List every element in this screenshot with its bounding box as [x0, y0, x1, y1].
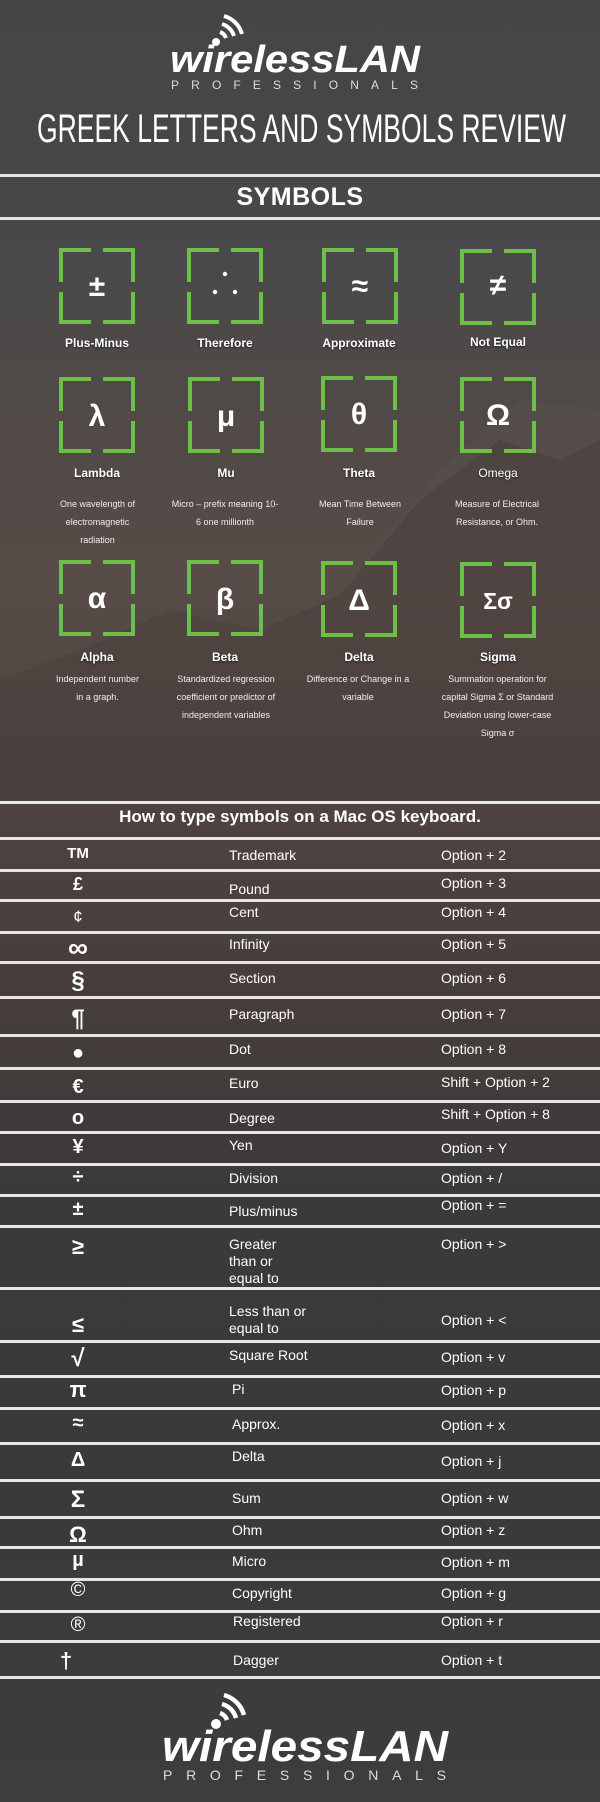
table: keyboard shortcuts: Option + /	[441, 1170, 502, 1186]
table: keyboard shortcuts: Option + t	[441, 1652, 502, 1668]
icon: beta: β	[216, 583, 234, 616]
text: alpha description: Independent number in a graph.	[56, 674, 139, 702]
table: keyboard shortcuts: Option + w	[441, 1490, 508, 1506]
icon: approximate: ≈	[352, 270, 368, 303]
row: yen	[72, 1136, 507, 1158]
table: keyboard shortcuts: Registered	[233, 1613, 301, 1629]
row: plus/minus	[72, 1197, 506, 1220]
icon: omega: Ω	[486, 399, 510, 432]
label: lambda: Lambda	[74, 466, 120, 480]
table: keyboard shortcuts: Greater	[229, 1236, 276, 1252]
label: not equal: Not Equal	[470, 335, 526, 349]
icon: beta	[187, 560, 263, 636]
table: keyboard shortcuts: Option + p	[441, 1382, 506, 1398]
header logo: wirelessLAN	[170, 39, 422, 81]
row: trademark	[67, 845, 506, 863]
icon: theta: θ	[351, 398, 367, 431]
row: paragraph	[71, 1005, 506, 1032]
row: approx	[72, 1412, 505, 1434]
background mountain silhouette	[0, 380, 600, 800]
label: mu: Mu	[217, 466, 235, 480]
icon: wifi	[212, 16, 242, 46]
text: lambda description: One wavelength of electromagnetic radiation	[60, 499, 135, 545]
table: keyboard shortcuts: Approx.	[232, 1416, 280, 1432]
icon: mu: μ	[217, 400, 235, 433]
table: keyboard shortcuts: Dagger	[233, 1652, 279, 1668]
label: alpha: Alpha	[80, 650, 114, 664]
table: keyboard shortcuts	[60, 845, 550, 1673]
table: keyboard shortcuts: Option + g	[441, 1585, 506, 1601]
label: beta: Beta	[212, 650, 238, 664]
label: therefore: Therefore	[197, 336, 253, 350]
label: omega: Omega	[478, 466, 518, 480]
table: keyboard shortcuts: Degree	[229, 1110, 275, 1126]
row: dot	[72, 1041, 506, 1064]
text: delta description: Difference or Change in a variable	[307, 674, 409, 702]
table: keyboard shortcuts: ®	[71, 1614, 85, 1636]
icon: lambda: λ	[89, 400, 106, 433]
panel: symbol grid	[0, 240, 600, 750]
table: keyboard shortcuts: Infinity	[229, 936, 269, 952]
icon: theta	[321, 376, 397, 452]
table: keyboard shortcuts: than or	[229, 1253, 273, 1269]
table: keyboard shortcuts: ●	[72, 1042, 84, 1064]
table: keyboard shortcuts: Yen	[229, 1137, 253, 1153]
table: keyboard shortcuts: Option + >	[441, 1236, 506, 1252]
row: cent	[73, 904, 506, 926]
table: keyboard shortcuts: Option + j	[441, 1453, 501, 1469]
table: keyboard shortcuts: equal to	[229, 1270, 279, 1286]
row: division	[72, 1166, 502, 1188]
table: keyboard shortcuts: equal to	[229, 1320, 279, 1336]
table: keyboard shortcuts: Delta	[232, 1448, 265, 1464]
row: section	[71, 967, 506, 994]
row: pi	[70, 1377, 506, 1402]
table heading: How to type symbols on a Mac OS keyboard.	[119, 807, 481, 826]
table: keyboard shortcuts: Pi	[232, 1381, 244, 1397]
table: keyboard shortcuts: †	[60, 1648, 72, 1673]
table: keyboard shortcuts: Copyright	[232, 1585, 292, 1601]
icon: alpha	[59, 560, 135, 636]
icon: alpha: α	[88, 582, 107, 615]
label: sigma: Sigma	[480, 650, 516, 664]
table: keyboard shortcuts: Option + m	[441, 1554, 510, 1570]
table: keyboard shortcuts: Division	[229, 1170, 278, 1186]
icon: therefore	[187, 248, 263, 324]
table: keyboard shortcuts: €	[72, 1076, 84, 1098]
text: mu description: Micro – prefix meaning 10-6 one millionth	[172, 499, 278, 527]
table: keyboard shortcuts: Euro	[229, 1075, 259, 1091]
label: approximate: Approximate	[322, 336, 396, 350]
table: keyboard shortcuts: Shift + Option + 2	[441, 1074, 550, 1090]
table: keyboard shortcuts: π	[70, 1377, 86, 1402]
text: theta description: Mean Time Between Failure	[319, 499, 401, 527]
footer logo	[150, 1688, 460, 1788]
row: sum	[71, 1486, 508, 1513]
table: keyboard shortcuts: µ	[72, 1549, 84, 1571]
icon: not equal	[460, 249, 536, 325]
label: plus-minus: Plus-Minus	[65, 336, 129, 350]
row: greater than or equal	[72, 1234, 506, 1286]
row: registered	[0, 1612, 600, 1614]
table: keyboard shortcuts: ©	[71, 1579, 85, 1601]
table: keyboard shortcuts: Cent	[229, 904, 259, 920]
table: keyboard shortcuts: §	[71, 967, 85, 994]
table: keyboard shortcuts: ∞	[68, 932, 88, 963]
text: omega description: Measure of Electrical Resistance, or Ohm.	[455, 499, 539, 527]
heading: symbols: SYMBOLS	[236, 183, 364, 211]
table: keyboard shortcuts: Square Root	[229, 1347, 308, 1363]
table: keyboard shortcuts: Δ	[71, 1449, 85, 1471]
row: square root	[71, 1345, 506, 1372]
icon: sigma	[460, 562, 536, 638]
text: sigma description: Summation operation for capital Sigma Σ or Standard Deviation using lower-case Sigma σ	[442, 674, 553, 738]
table: keyboard shortcuts: Shift + Option + 8	[441, 1106, 550, 1122]
table lines	[0, 801, 600, 1679]
icon: sigma: Σσ	[483, 588, 513, 614]
table: keyboard shortcuts: Sum	[232, 1490, 261, 1506]
table: keyboard shortcuts: TM	[67, 845, 89, 862]
text: beta description: Standardized regression coefficient or predictor of independent variables	[177, 674, 275, 720]
table: keyboard shortcuts: £	[73, 874, 83, 894]
table: keyboard shortcuts: ≥	[72, 1234, 84, 1259]
table: keyboard shortcuts: Option + r	[441, 1613, 503, 1629]
table: keyboard shortcuts: Option + <	[441, 1312, 506, 1328]
table: keyboard shortcuts: Option + 3	[441, 875, 506, 891]
row: delta	[71, 1448, 501, 1471]
row: euro	[72, 1074, 550, 1098]
table: keyboard shortcuts: Option + 6	[441, 970, 506, 986]
icon: omega	[460, 377, 536, 453]
row: less than or equal	[72, 1303, 506, 1337]
row: dagger	[0, 1642, 600, 1644]
table: keyboard shortcuts: ≈	[72, 1412, 83, 1434]
table: keyboard shortcuts: ÷	[72, 1166, 83, 1188]
table: keyboard shortcuts: ¶	[71, 1005, 85, 1032]
table: keyboard shortcuts: Option + x	[441, 1417, 505, 1433]
table: keyboard shortcuts: Option + Y	[441, 1140, 507, 1156]
table: keyboard shortcuts: Option + 7	[441, 1006, 506, 1022]
icon: delta: Δ	[348, 584, 370, 617]
table: keyboard shortcuts: Less than or	[229, 1303, 306, 1319]
table: keyboard shortcuts: Option + z	[441, 1522, 505, 1538]
table: keyboard shortcuts: Section	[229, 970, 276, 986]
row: ohm	[69, 1522, 505, 1547]
table: keyboard shortcuts: Ohm	[232, 1522, 262, 1538]
table: keyboard shortcuts: Option + 8	[441, 1041, 506, 1057]
table: keyboard shortcuts: Trademark	[229, 847, 296, 863]
footer logo: PROFESSIONALS	[163, 1767, 446, 1783]
table: keyboard shortcuts: Option + v	[441, 1349, 505, 1365]
table: keyboard shortcuts: Dot	[229, 1041, 251, 1057]
footer logo: wirelessLAN	[162, 1722, 449, 1771]
table: keyboard shortcuts: ≤	[72, 1312, 84, 1337]
label: theta: Theta	[343, 466, 375, 480]
table: keyboard shortcuts: Option + 5	[441, 936, 506, 952]
table: keyboard shortcuts: Option + =	[441, 1197, 506, 1213]
icon: plus-minus	[59, 248, 135, 324]
icon: lambda	[59, 377, 135, 453]
row: infinity	[68, 932, 506, 963]
table: keyboard shortcuts: ¥	[72, 1136, 84, 1158]
table: keyboard shortcuts: Ω	[69, 1522, 87, 1547]
table: keyboard shortcuts: Σ	[71, 1486, 85, 1513]
header logo	[170, 14, 422, 92]
table: keyboard shortcuts: Pound	[229, 881, 269, 897]
row: copyright	[70, 1579, 506, 1601]
table: keyboard shortcuts: √	[71, 1345, 85, 1372]
icon: approximate	[322, 248, 398, 324]
table: keyboard shortcuts: ±	[72, 1198, 83, 1220]
icon: mu	[188, 377, 264, 453]
table: keyboard shortcuts: Plus/minus	[229, 1203, 297, 1219]
header logo: PROFESSIONALS	[171, 78, 418, 92]
table: keyboard shortcuts: Option + 2	[441, 847, 506, 863]
icon: plus-minus: ±	[89, 270, 105, 303]
icon: wifi	[211, 1695, 244, 1729]
table: keyboard shortcuts: Micro	[232, 1553, 266, 1569]
row: micro	[72, 1549, 510, 1571]
label: delta: Delta	[344, 650, 374, 664]
row: degree	[72, 1106, 550, 1129]
table: keyboard shortcuts: Option + 4	[441, 904, 506, 920]
table: keyboard shortcuts: ¢	[73, 907, 83, 926]
icon: not equal: ≠	[490, 269, 507, 302]
table: keyboard shortcuts: o	[72, 1107, 84, 1129]
icon: delta	[321, 561, 397, 637]
row: pound	[73, 874, 506, 897]
table: keyboard shortcuts: Paragraph	[229, 1006, 294, 1022]
